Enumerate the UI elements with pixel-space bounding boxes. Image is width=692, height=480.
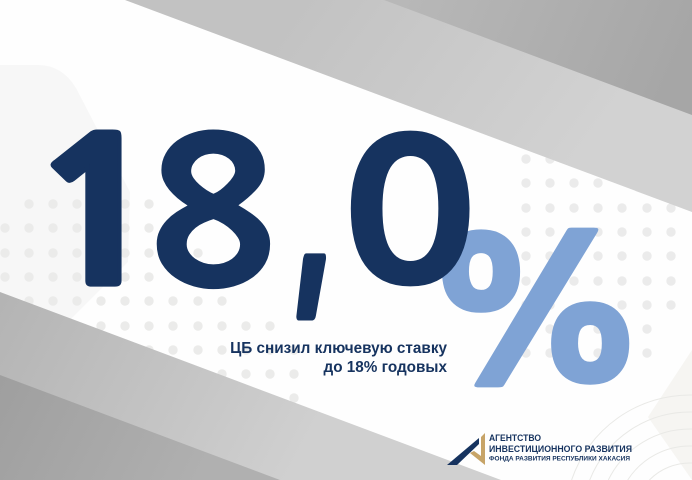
dot pattern: right <box>521 154 676 358</box>
caption: ЦБ снизил ключевую ставку <box>230 340 447 357</box>
headline figure: 18,0: , <box>290 14 333 323</box>
headline figure: 18,0: 0 <box>337 116 477 312</box>
headline figure: 18,0: 8 <box>148 117 277 313</box>
caption <box>230 340 447 376</box>
logo: agency <box>447 433 632 465</box>
diagonal band: bottom dark <box>0 375 280 480</box>
logo mark: navy stripe <box>447 438 479 465</box>
logo: agency: ИНВЕСТИЦИОННОГО РАЗВИТИЯ <box>489 444 632 454</box>
diagonal band: top dark <box>384 0 692 115</box>
logo: agency: ФОНДА РАЗВИТИЯ РЕСПУБЛИКИ ХАКАСИЯ <box>489 456 630 462</box>
diagonal band: bottom light <box>0 292 501 480</box>
dot pattern: left <box>0 199 299 403</box>
caption: до 18% годовых <box>323 359 447 376</box>
diagonal band: top light <box>125 0 692 212</box>
headline figure: 18,0 <box>28 14 477 323</box>
pale shape: top left <box>0 65 130 320</box>
logo mark: gold chevron <box>470 433 485 465</box>
pale triangle: bottom right <box>648 350 692 480</box>
percent sign: % <box>418 217 649 412</box>
headline figure: 18,0: 1 <box>28 116 169 314</box>
concentric arcs: bottom right <box>572 395 692 480</box>
logo text: АГЕНТСТВО <box>489 433 541 443</box>
